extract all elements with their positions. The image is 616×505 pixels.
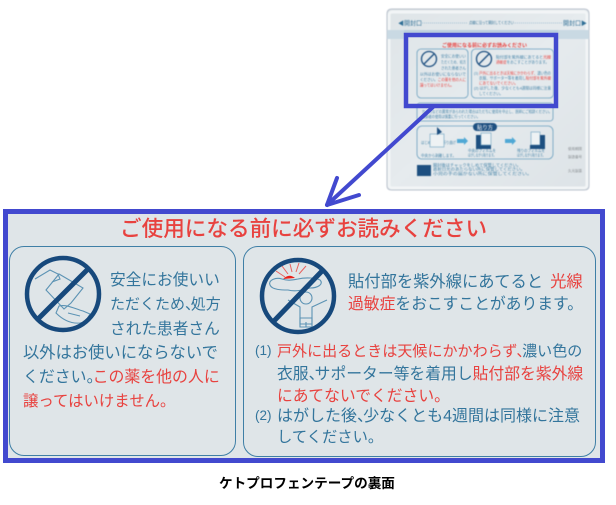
mini prohibition icons bbox=[422, 52, 492, 66]
text block: left caution: された患者さん bbox=[110, 321, 220, 338]
mini text: 開封後はチャックをしめて保管してください。 bbox=[433, 162, 521, 168]
panel: package photo thumbnail: 貼り方 bbox=[477, 124, 493, 132]
panel: left caution bbox=[9, 246, 236, 456]
mini text: 過敏症をおこすことがあります。 bbox=[496, 60, 549, 64]
pouch body bbox=[387, 9, 589, 190]
mini text: はがしながら貼ります。 bbox=[468, 152, 496, 158]
mini text: 衣服、サポーター等を着用し貼付部を紫外線 bbox=[479, 76, 551, 80]
mini text: してください。 bbox=[479, 91, 503, 96]
mini text: ただくため、処方 bbox=[441, 60, 466, 64]
text block: right caution: (1) bbox=[255, 343, 272, 358]
mini text: 安全にお使いい bbox=[441, 54, 466, 58]
text block: left caution: 譲ってはいけません。 bbox=[23, 393, 175, 410]
text block: right caution: にあてないでください。 bbox=[277, 388, 450, 405]
panel: package photo thumbnail: 製造番号 bbox=[568, 154, 582, 159]
text block: right caution: はがした後、少なくとも4週間は同様に注意 bbox=[277, 408, 580, 425]
mini text: 以外はお使いにならないで bbox=[420, 72, 466, 76]
panel: package photo thumbnail: 使用期限 bbox=[568, 146, 582, 151]
panel: right caution bbox=[243, 246, 596, 457]
text block: left caution: 安全にお使いい bbox=[110, 272, 220, 289]
panel: enlarged warning label bbox=[3, 209, 605, 463]
mini text bbox=[420, 54, 552, 176]
text block: right caution: してください。 bbox=[277, 429, 383, 446]
top opening label: ◀開封口 bbox=[398, 20, 422, 28]
text block: right caution: 戸外に出るときは天候にかかわらず、濃い色の bbox=[277, 343, 582, 360]
mini text: 中央から剥離します。 bbox=[421, 153, 456, 158]
top opening label bbox=[398, 20, 587, 28]
mini text: 譲ってはいけません。 bbox=[420, 82, 454, 88]
top opening label: 開封口▶ bbox=[563, 20, 587, 28]
mini text: 貼付部を紫外線にあてると 光線 bbox=[496, 54, 551, 60]
text block: right caution: (2) bbox=[255, 408, 272, 423]
storage label bbox=[417, 165, 431, 176]
text block: left caution bbox=[23, 271, 221, 410]
text block: right caution: 衣服、サポーター等を着用し貼付部を紫外線 bbox=[277, 366, 583, 383]
text block: left caution: ください。この薬を他の人に bbox=[23, 369, 220, 386]
panel: package photo thumbnail bbox=[386, 8, 590, 191]
mini text: かぶれなどの異常があらわれた場合はただちに使用を中止し、医師にご相談ください。 bbox=[422, 109, 552, 114]
mini panels bbox=[417, 49, 554, 159]
mini text: 小児の手の届かない所に保管してください。 bbox=[433, 171, 532, 176]
mini text: はじめに2つに折り曲げ bbox=[421, 140, 456, 145]
text block: right caution bbox=[255, 273, 583, 446]
mini text: 高齢者の使用は慎重に行ってください。 bbox=[422, 114, 480, 119]
text block: right caution: 過敏症をおこすことがあります。 bbox=[348, 296, 583, 313]
panel: package photo thumbnail: 久光製薬 bbox=[568, 168, 582, 173]
heading: ご使用になる前に必ずお読みください bbox=[120, 216, 487, 241]
how-to label bbox=[473, 123, 497, 131]
mini text: はがしながら貼ります。 bbox=[517, 152, 545, 158]
mini title: ご使用になる前に必ずお読みください bbox=[442, 42, 527, 49]
text block: left caution: 以外はお使いにならないで bbox=[23, 344, 218, 362]
mini text: 残りのフィルムを bbox=[517, 148, 545, 153]
text block: left caution: ただくため、処方 bbox=[110, 296, 221, 313]
how-to icons bbox=[430, 127, 545, 149]
mini text: 直射日光のあたらない所に保管してください。 bbox=[433, 166, 525, 172]
caption: ケトプロフェンテープの裏面 bbox=[219, 476, 395, 491]
mini text: (2) はがした後、少なくとも4週間は同様に注意 bbox=[474, 86, 551, 90]
mini text: にあてないでください。 bbox=[479, 80, 518, 86]
mini text: された患者さん bbox=[441, 66, 466, 70]
mini text: 中央のフィルムを bbox=[468, 148, 496, 153]
mini text: (1) 戸外に出るときは天候にかかわらず、濃い色の bbox=[474, 70, 551, 76]
text block: right caution: 貼付部を紫外線にあてると 光線 bbox=[348, 273, 583, 291]
mini text: ください。この薬を他の人に bbox=[420, 77, 466, 82]
top opening label: 点線に沿って開封してください bbox=[469, 20, 514, 25]
